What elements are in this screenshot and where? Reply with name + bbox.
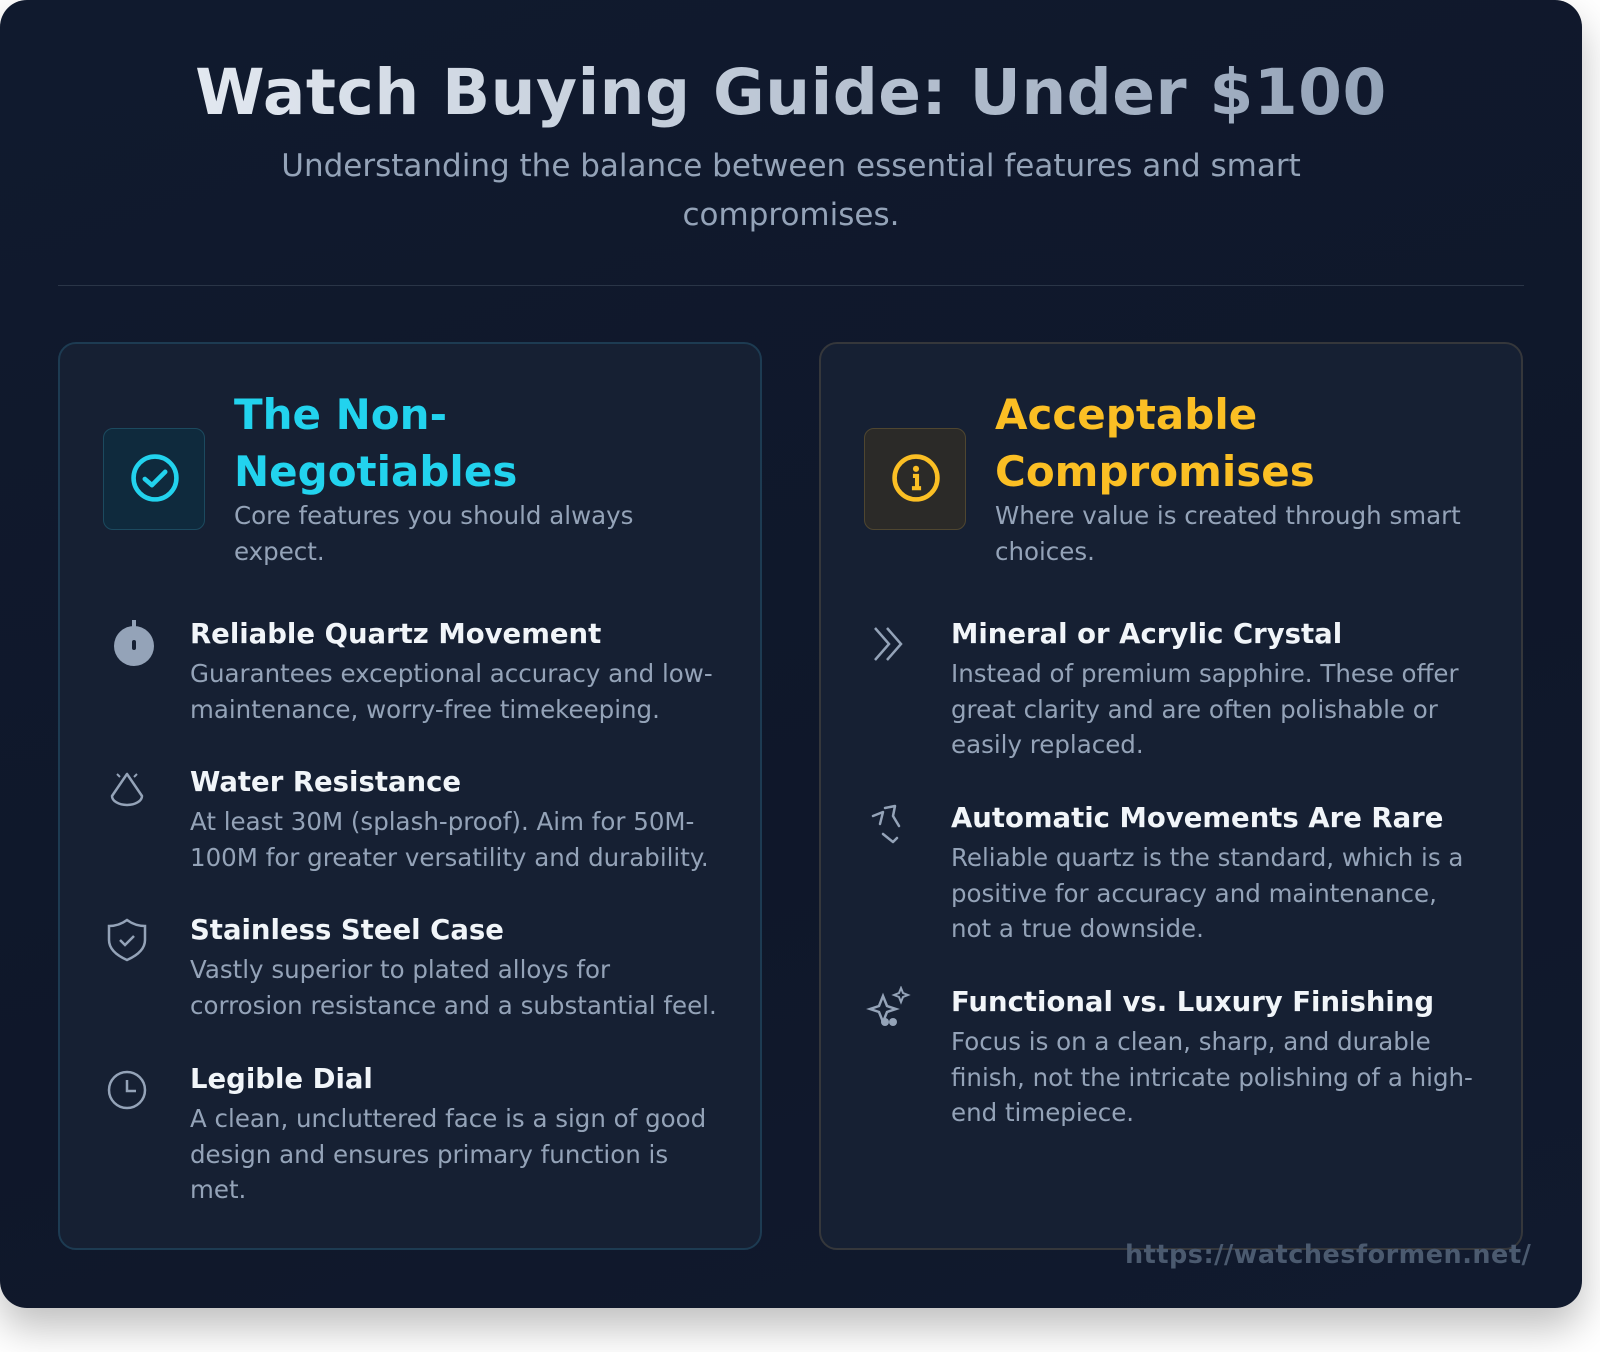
item: quartz: Guarantees exceptional accuracy and low-maintenance, worry-free timekeeping. [190,659,713,724]
item: finishing [866,986,1473,1127]
heading [234,390,517,496]
item: finishing: Focus is on a clean, sharp, and durable finish, not the intricate polishing of a high-end timepiece. [951,1027,1473,1127]
item: water [110,766,709,872]
item: crystal: Instead of premium sapphire. These offer great clarity and are often polishable or easily replaced. [951,659,1459,759]
item: finishing: Functional vs. Luxury Finishing [951,986,1434,1018]
icon: check circle [103,428,205,530]
heading: Compromises [995,447,1315,496]
panel: compromises [819,342,1523,1250]
heading: Negotiables [234,447,517,496]
icon: info [864,428,966,530]
item: automatic: Reliable quartz is the standard, which is a positive for accuracy and maintenance, not a true downside. [951,843,1463,943]
title: Watch Buying Guide: Under $100 [195,56,1387,129]
item: dial: Legible Dial [190,1063,373,1095]
item: automatic: Automatic Movements Are Rare [951,802,1443,834]
item: automatic [872,802,1463,943]
item: steel [108,914,717,1020]
item: quartz: Reliable Quartz Movement [190,618,601,650]
item: dial [108,1063,706,1204]
item: quartz [114,618,713,724]
heading subtitle: Core features you should always expect. [234,501,633,566]
item: steel: Stainless Steel Case [190,914,504,946]
footer url: https://watchesformen.net/ [1125,1240,1531,1270]
icon: sparkles [866,986,910,1026]
item: crystal: Mineral or Acrylic Crystal [951,618,1342,650]
icon: water drop [110,772,144,806]
icon: chevrons [874,627,902,661]
icon: shield [108,918,146,962]
icon: clock [108,1070,146,1110]
item: crystal [874,618,1459,759]
item: dial: A clean, uncluttered face is a sign of good design and ensures primary function is met. [190,1104,706,1204]
heading: The Non- [234,390,447,439]
icon: rotor [872,804,900,844]
item: steel: Vastly superior to plated alloys for corrosion resistance and a substantial feel. [190,955,717,1020]
subtitle: Understanding the balance between essential features and smart compromises. [281,148,1301,233]
heading: Acceptable [995,390,1257,439]
item: water: Water Resistance [190,766,461,798]
icon: stopwatch [114,620,154,666]
panel: non-negotiables [58,342,762,1250]
item: water: At least 30M (splash-proof). Aim for 50M-100M for greater versatility and durability. [190,807,709,872]
heading [995,390,1315,496]
heading subtitle: Where value is created through smart choices. [995,501,1461,566]
